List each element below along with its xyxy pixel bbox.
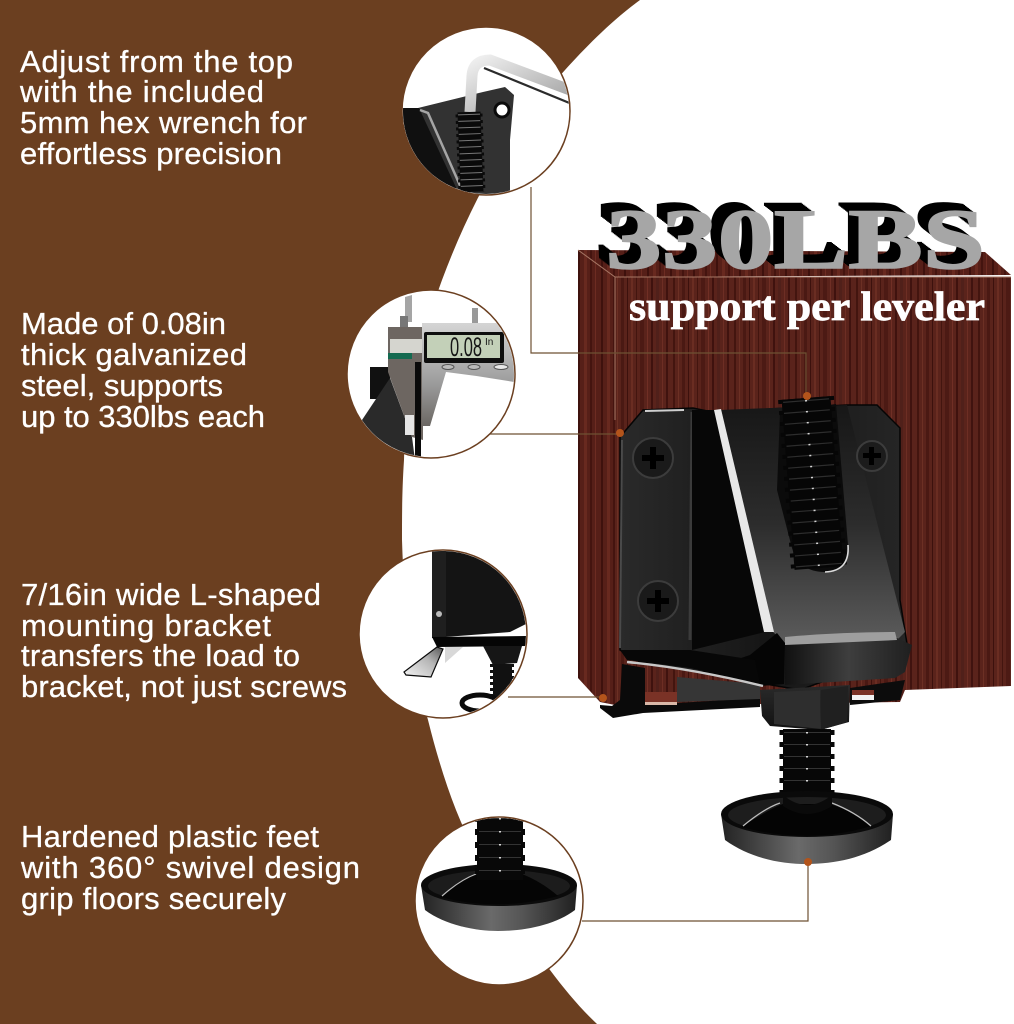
bracket back plate [620, 405, 908, 690]
text block: L-shaped bracket: transfers the load to [21, 638, 300, 673]
text block: hex wrench: effortless precision [20, 136, 282, 171]
callout dots [599, 392, 812, 866]
leader line: bracket callout [508, 696, 603, 698]
hex nut [760, 685, 850, 730]
wood cabinet block [578, 250, 1011, 706]
circle detail: caliper measuring 0.08in [347, 290, 515, 462]
circle detail: L-shaped bracket [359, 548, 530, 718]
text block: hex wrench: with the included [19, 74, 264, 109]
screw lower left [638, 581, 678, 621]
text block: hex wrench: 5mm hex wrench for [20, 105, 307, 140]
text block: L-shaped bracket: 7/16in wide L-shaped [21, 577, 321, 612]
circle detail: hex wrench adjustment [402, 27, 572, 196]
text block: galvanized steel [21, 306, 265, 434]
leader line: foot callout [582, 864, 808, 921]
heading: 330LBS: 330LBS [606, 191, 985, 287]
leader line: hex wrench callout [531, 187, 806, 398]
bracket plate highlights [620, 410, 765, 650]
brown background panel [0, 0, 640, 1024]
screw top right [857, 441, 887, 471]
text block: plastic feet: grip floors securely [21, 881, 286, 916]
bracket lower frame [600, 664, 905, 718]
text block: L-shaped bracket: bracket, not just screws [21, 669, 347, 704]
circle detail: plastic foot [415, 815, 583, 985]
text block: plastic feet: Hardened plastic feet [21, 819, 319, 854]
leveler bracket product [600, 398, 912, 864]
bright bend edge [714, 409, 774, 632]
front lip [620, 632, 912, 686]
text block: galvanized steel: up to 330lbs each [21, 399, 265, 434]
text block: plastic feet: with 360° swivel design [20, 850, 360, 885]
leader line: thickness callout [490, 433, 620, 435]
screw top left [633, 438, 673, 478]
circle detail: caliper measuring 0.08in: In [485, 337, 493, 348]
text block: galvanized steel: steel, supports [21, 368, 223, 403]
text block: L-shaped bracket: mounting bracket [21, 608, 271, 643]
threaded rod in slot [777, 398, 848, 572]
sub-heading: support per leveler [629, 283, 985, 329]
text block: hex wrench [19, 44, 307, 171]
text block: L-shaped bracket [21, 577, 347, 704]
lower threaded rod [783, 729, 831, 813]
bracket sloped front face [720, 405, 905, 643]
circle detail: caliper measuring 0.08in: 0.08 [450, 332, 482, 362]
text block: hex wrench: Adjust from the top [20, 44, 293, 79]
text block: galvanized steel: thick galvanized [21, 337, 247, 372]
text block: plastic feet [20, 819, 360, 916]
text block: galvanized steel: Made of 0.08in [21, 306, 226, 341]
foot [721, 791, 893, 864]
